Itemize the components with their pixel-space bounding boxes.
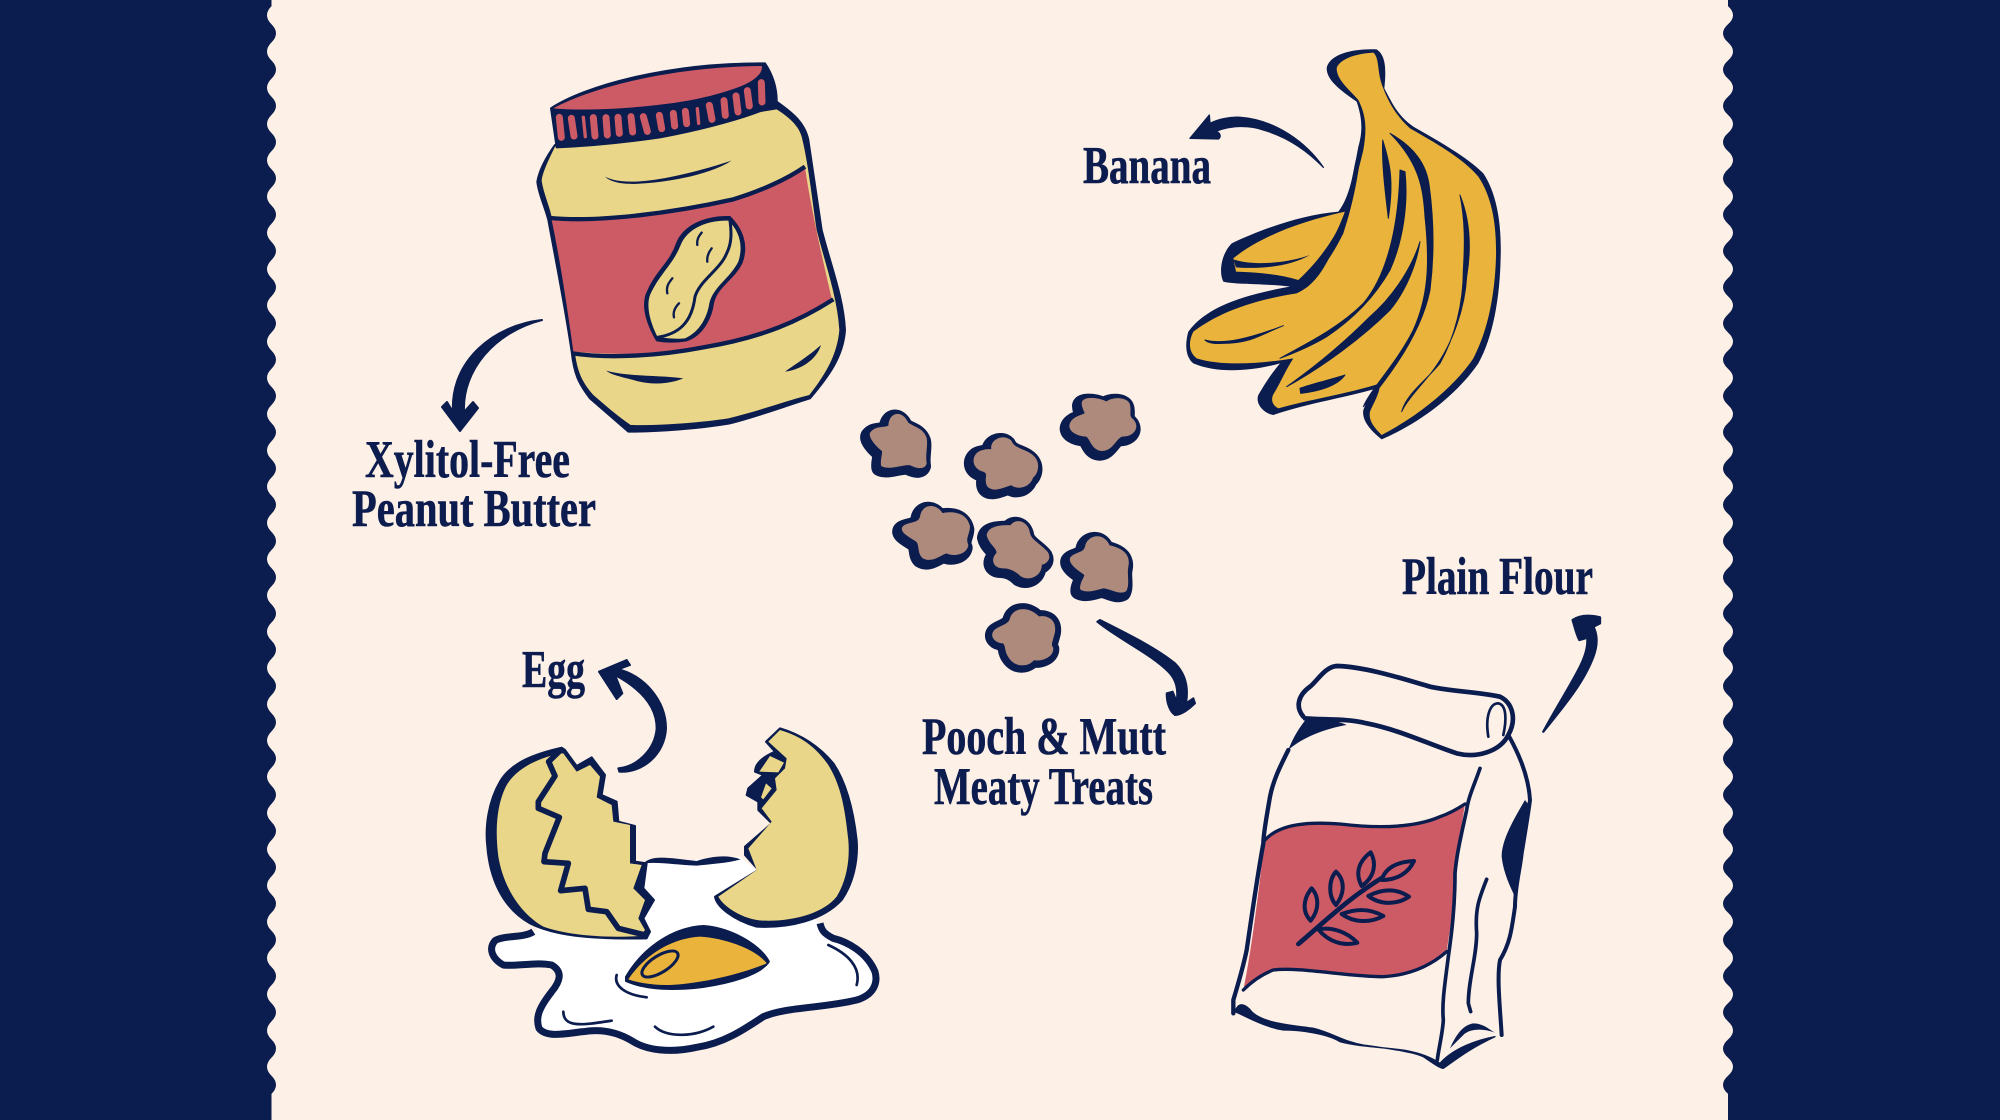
label: egg: Egg (522, 641, 585, 699)
treat 6 (1069, 538, 1127, 594)
illustration: bananas (1186, 49, 1501, 439)
jar highlights (605, 161, 821, 384)
yolk (625, 925, 770, 990)
treat 2 (973, 439, 1036, 491)
label: peanut butter: Xylitol-Free (365, 431, 570, 489)
banana outline (1186, 49, 1501, 439)
illustration: peanut butter jar (537, 63, 845, 432)
label: banana: Banana (1083, 137, 1211, 195)
label: treats: Meaty Treats (934, 758, 1153, 816)
label: treats (922, 708, 1166, 816)
treat 5 (986, 523, 1048, 579)
arrow: plain flour (1543, 616, 1600, 732)
arrow: egg (599, 660, 666, 772)
peanut icon (645, 217, 745, 342)
treat 3 (1068, 400, 1135, 452)
illustration: cracked egg (487, 728, 876, 1050)
arrow: banana (1190, 115, 1323, 167)
right shell (715, 728, 857, 927)
illustration: flour bag (1233, 666, 1530, 1068)
treat 7 (993, 611, 1053, 664)
label: treats: Pooch & Mutt (922, 708, 1166, 766)
illustration: treats (869, 400, 1135, 664)
jar lid (551, 63, 777, 147)
label: plain flour: Plain Flour (1402, 548, 1593, 606)
bag label (1243, 804, 1465, 990)
right navy band with scalloped edge (1723, 0, 2000, 1120)
small banana (1233, 130, 1363, 292)
arrow: peanut butter (442, 320, 542, 431)
egg white (490, 856, 876, 1050)
treat 4 (901, 508, 968, 561)
bag outlines (1233, 666, 1530, 1068)
icon: wheat sprig (1298, 852, 1414, 944)
label: peanut butter (352, 431, 596, 538)
arrow: treats (1097, 620, 1195, 715)
jar body (537, 102, 845, 432)
left navy band with scalloped edge (0, 0, 276, 1120)
label: peanut butter: Peanut Butter (352, 480, 596, 538)
jar label (550, 167, 833, 356)
banana fill (1190, 53, 1496, 435)
banana contour lines (1205, 133, 1469, 412)
left shell (487, 748, 654, 938)
treat 1 (869, 416, 925, 469)
